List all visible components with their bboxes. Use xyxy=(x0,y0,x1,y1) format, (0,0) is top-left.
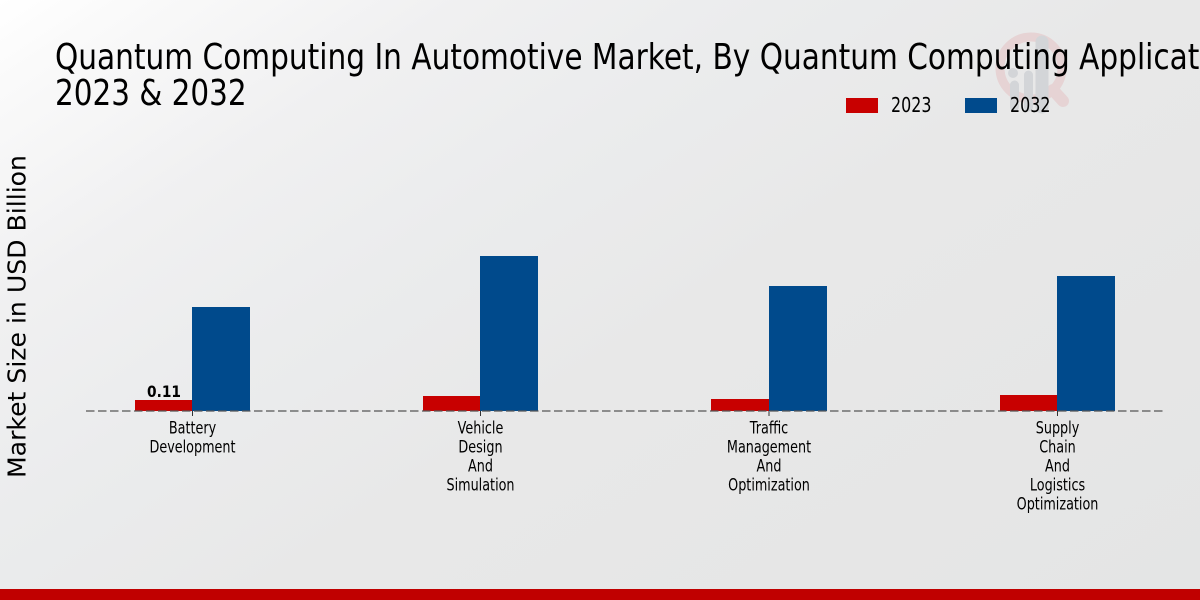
category label: Traffic Management And Optimization: Management xyxy=(727,438,811,457)
title: 2023 & 2032 xyxy=(55,72,247,114)
category label: Supply Chain And Logistics Optimization: And xyxy=(1045,457,1070,476)
category label: Supply Chain And Logistics Optimization: Supply xyxy=(1036,419,1080,438)
group: Vehicle Design And Simulation xyxy=(423,256,538,411)
category label: Traffic Management And Optimization xyxy=(727,419,811,495)
group: Traffic Management And Optimization xyxy=(711,286,827,411)
category label: Supply Chain And Logistics Optimization: Optimization xyxy=(1017,495,1098,514)
category label: Battery Development xyxy=(149,419,236,457)
category label: Supply Chain And Logistics Optimization: Logistics xyxy=(1030,476,1085,495)
title xyxy=(55,36,1200,114)
group: Supply Chain And Logistics Optimization xyxy=(1000,276,1115,411)
legend item: 2032 xyxy=(965,94,1050,118)
legend item: 2023 xyxy=(846,94,931,118)
group: Battery Development: 0.11 xyxy=(147,382,181,401)
category label: Traffic Management And Optimization: Optimization xyxy=(728,476,810,495)
category label: Battery Development: Development xyxy=(149,438,236,457)
category label: Traffic Management And Optimization: And xyxy=(757,457,781,476)
category label: Supply Chain And Logistics Optimization: Chain xyxy=(1039,438,1076,457)
category label: Traffic Management And Optimization: Traffic xyxy=(749,419,788,438)
category label: Vehicle Design And Simulation: Simulation xyxy=(446,476,515,495)
legend item: 2032: 2032 xyxy=(1010,94,1050,118)
group: Battery Development xyxy=(135,307,250,411)
legend xyxy=(846,94,1050,118)
y-axis label: Market Size in USD Billion xyxy=(3,155,31,478)
footer bar xyxy=(0,589,1200,600)
category label: Battery Development: Battery xyxy=(169,419,216,438)
category label: Vehicle Design And Simulation: And xyxy=(468,457,493,476)
category label: Vehicle Design And Simulation xyxy=(446,419,515,495)
category label: Vehicle Design And Simulation: Vehicle xyxy=(458,419,503,438)
bar chart xyxy=(86,256,1164,416)
icon: watermark logo xyxy=(1000,37,1063,107)
category label: Supply Chain And Logistics Optimization xyxy=(1017,419,1098,514)
legend item: 2023: 2023 xyxy=(891,94,931,118)
category label: Vehicle Design And Simulation: Design xyxy=(458,438,503,457)
